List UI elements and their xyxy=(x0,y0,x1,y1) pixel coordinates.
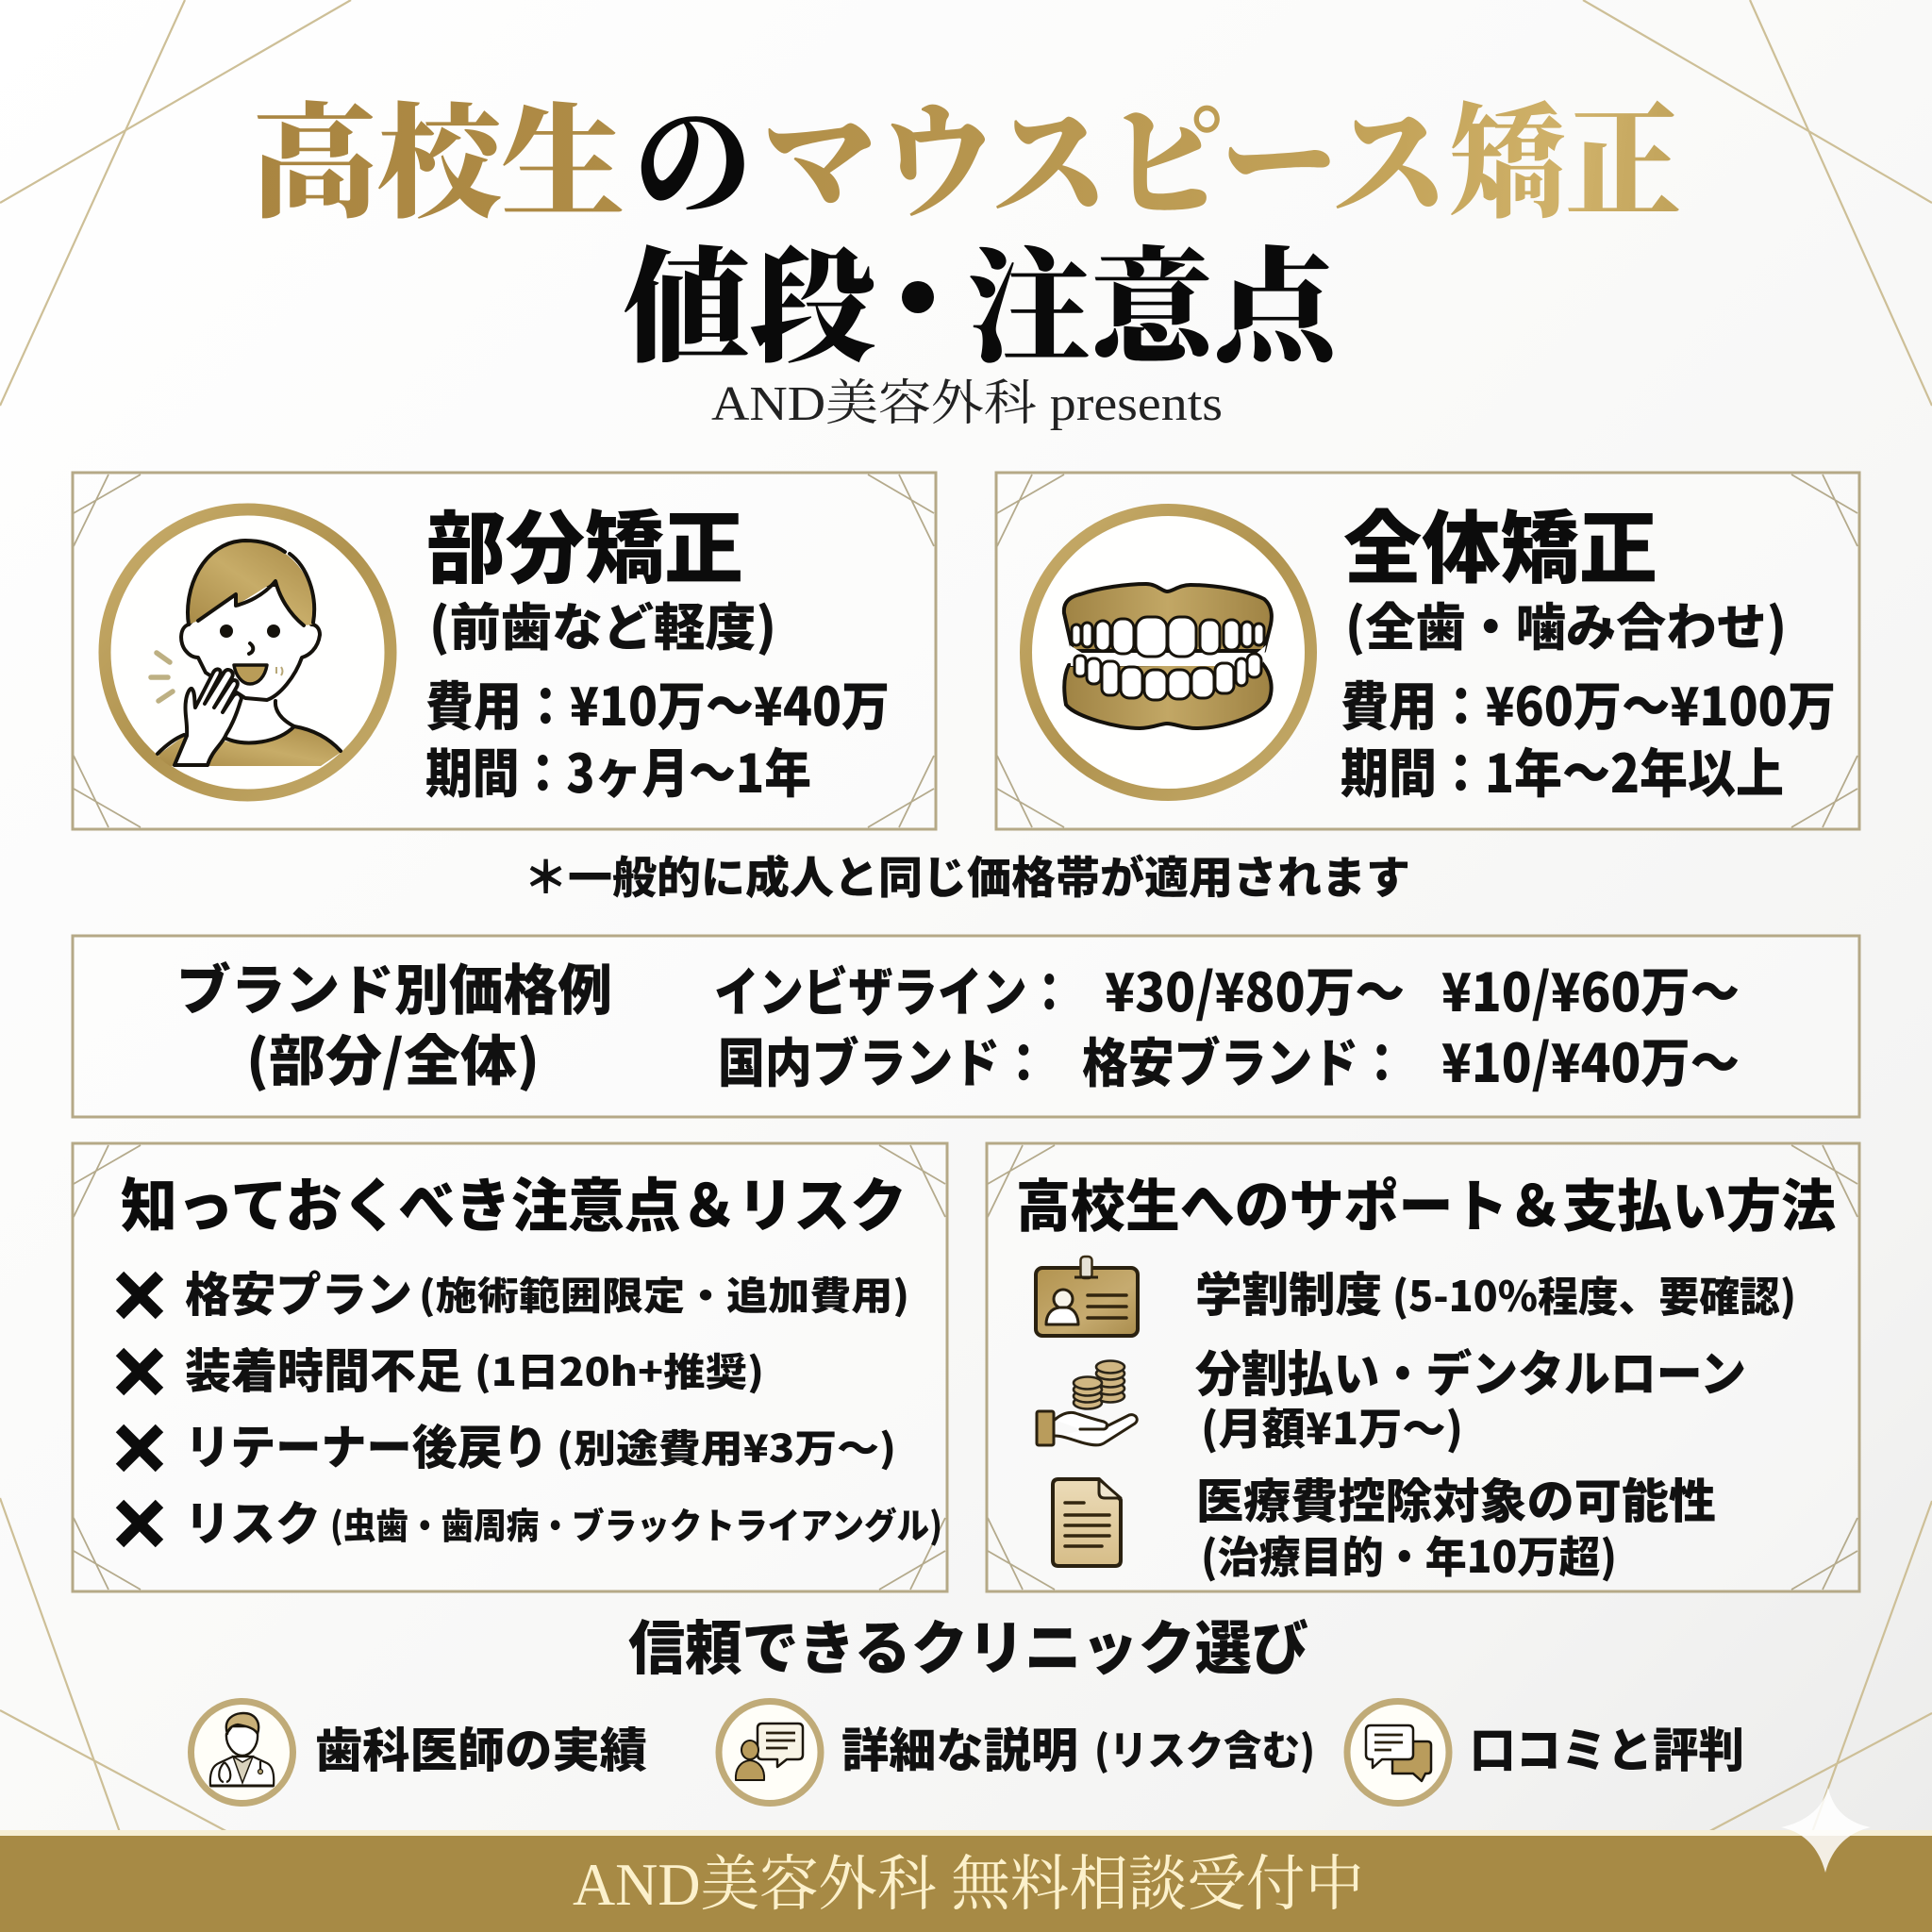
note: partial correction scope: (前歯など軽度) xyxy=(429,586,776,660)
title: main heading xyxy=(253,63,1682,242)
brand row: Invisalign: インビザライン： xyxy=(714,951,1072,1027)
item: medical deduction: 医療費控除対象の可能性 xyxy=(1196,1464,1716,1532)
title: main heading: マウスピース矯正 xyxy=(761,63,1682,242)
item: medical deduction: (治療目的・年10万超) xyxy=(1201,1524,1617,1586)
brand panel heading: ブランド別価格例 xyxy=(176,946,612,1025)
risk item: wear time: 装着時間不足 xyxy=(185,1334,462,1402)
heading: partial correction: 部分矯正 xyxy=(426,486,743,600)
item: medical deduction xyxy=(1196,1464,1716,1586)
title: main heading: 高校生 xyxy=(253,63,625,242)
brand row: domestic and budget: 国内ブランド： xyxy=(718,1022,1047,1098)
risk item: dental risks: リスク xyxy=(185,1487,321,1555)
heading: support: 高校生へのサポート＆支払い方法 xyxy=(1016,1161,1836,1243)
icon: review bubbles xyxy=(1347,1702,1449,1804)
item: installments: 分割払い・デンタルローン xyxy=(1195,1335,1746,1406)
icon: person with speech bubble xyxy=(719,1702,821,1804)
risk item: wear time xyxy=(120,1334,764,1402)
subtitle: price and notes: 注意点 xyxy=(967,208,1347,387)
panel: cautions and risks xyxy=(73,1143,947,1591)
brand row: domestic and budget: 格安ブランド： xyxy=(1082,1022,1405,1098)
subtitle: price and notes xyxy=(623,208,1347,387)
label: reviews: 口コミと評判 xyxy=(1470,1713,1744,1781)
icon: teeth model xyxy=(1026,509,1311,794)
brand panel heading: (部分/全体) xyxy=(246,1017,540,1096)
footer text: free consultation: AND美容外科 無料相談受付中 xyxy=(573,1851,1364,1918)
presenter line: AND美容外科 presents xyxy=(711,377,1223,431)
label: dentist record: 歯科医師の実績 xyxy=(315,1713,647,1781)
icon: document xyxy=(1053,1479,1121,1566)
label: detailed explanation xyxy=(841,1713,1315,1781)
brand row: domestic and budget: ¥10/¥40万〜 xyxy=(1441,1022,1740,1098)
item: installments xyxy=(1195,1335,1746,1457)
risk item: retainer relapse: (別途費用¥3万〜) xyxy=(557,1417,896,1474)
heading: full correction: 全体矯正 xyxy=(1343,486,1657,600)
item: student discount: (5-10%程度、要確認) xyxy=(1392,1263,1796,1324)
panel: brand price examples xyxy=(73,936,1859,1117)
icon: student ID badge xyxy=(1036,1257,1138,1336)
risk item: dental risks: (虫歯・歯周病・ブラックトライアングル) xyxy=(330,1497,942,1549)
brand row: Invisalign: ¥10/¥60万〜 xyxy=(1441,951,1740,1027)
risk item: budget plans xyxy=(120,1257,909,1325)
subtitle: price and notes: 値段 xyxy=(623,208,875,387)
risk item: wear time: (1日20h+推奨) xyxy=(475,1341,764,1397)
risk item: retainer relapse xyxy=(120,1410,896,1478)
risk item: budget plans: (施術範囲限定・追加費用) xyxy=(419,1264,909,1321)
note: full correction scope: (全歯・噛み合わせ) xyxy=(1345,586,1787,660)
panel: student support and payment xyxy=(987,1143,1859,1591)
brand row: Invisalign: ¥30/¥80万〜 xyxy=(1105,951,1405,1027)
footer band xyxy=(0,1830,1932,1932)
brand row: Invisalign xyxy=(714,951,1740,1027)
label: detailed explanation: (リスク含む) xyxy=(1094,1719,1315,1777)
cost: full: 費用：¥60万〜¥100万 xyxy=(1341,665,1836,741)
clinic point: dentist record xyxy=(191,1702,647,1804)
cost: partial: 費用：¥10万〜¥40万 xyxy=(425,665,890,741)
footnote: adult pricing: ＊一般的に成人と同じ価格帯が適用されます xyxy=(524,841,1410,907)
clinic point: reviews xyxy=(1347,1702,1744,1804)
title: main heading: の xyxy=(634,63,752,242)
duration: full: 期間：1年〜2年以上 xyxy=(1341,732,1784,808)
duration: partial: 期間：3ヶ月〜1年 xyxy=(425,732,811,808)
risk item: dental risks xyxy=(120,1487,942,1555)
label: detailed explanation: 詳細な説明 xyxy=(841,1713,1078,1781)
item: student discount: 学割制度 xyxy=(1195,1257,1382,1325)
panel: partial correction xyxy=(73,473,936,829)
icon: sparkle mark xyxy=(1781,1788,1871,1873)
item: installments: (月額¥1万〜) xyxy=(1201,1395,1463,1457)
risk item: retainer relapse: リテーナー後戻り xyxy=(185,1410,548,1478)
item: student discount xyxy=(1195,1257,1796,1325)
icon: person touching mouth xyxy=(105,509,391,795)
brand panel heading xyxy=(176,946,612,1096)
heading: choosing a clinic: 信頼できるクリニック選び xyxy=(628,1601,1308,1686)
risk item: budget plans: 格安プラン xyxy=(185,1257,412,1325)
clinic point: detailed explanation xyxy=(719,1702,1315,1804)
brand row: domestic and budget xyxy=(718,1022,1740,1098)
panel: full correction xyxy=(996,473,1859,829)
icon: doctor xyxy=(191,1702,292,1804)
icon: coins on hand xyxy=(1037,1360,1137,1445)
heading: cautions: 知っておくべき注意点＆リスク xyxy=(121,1158,907,1243)
